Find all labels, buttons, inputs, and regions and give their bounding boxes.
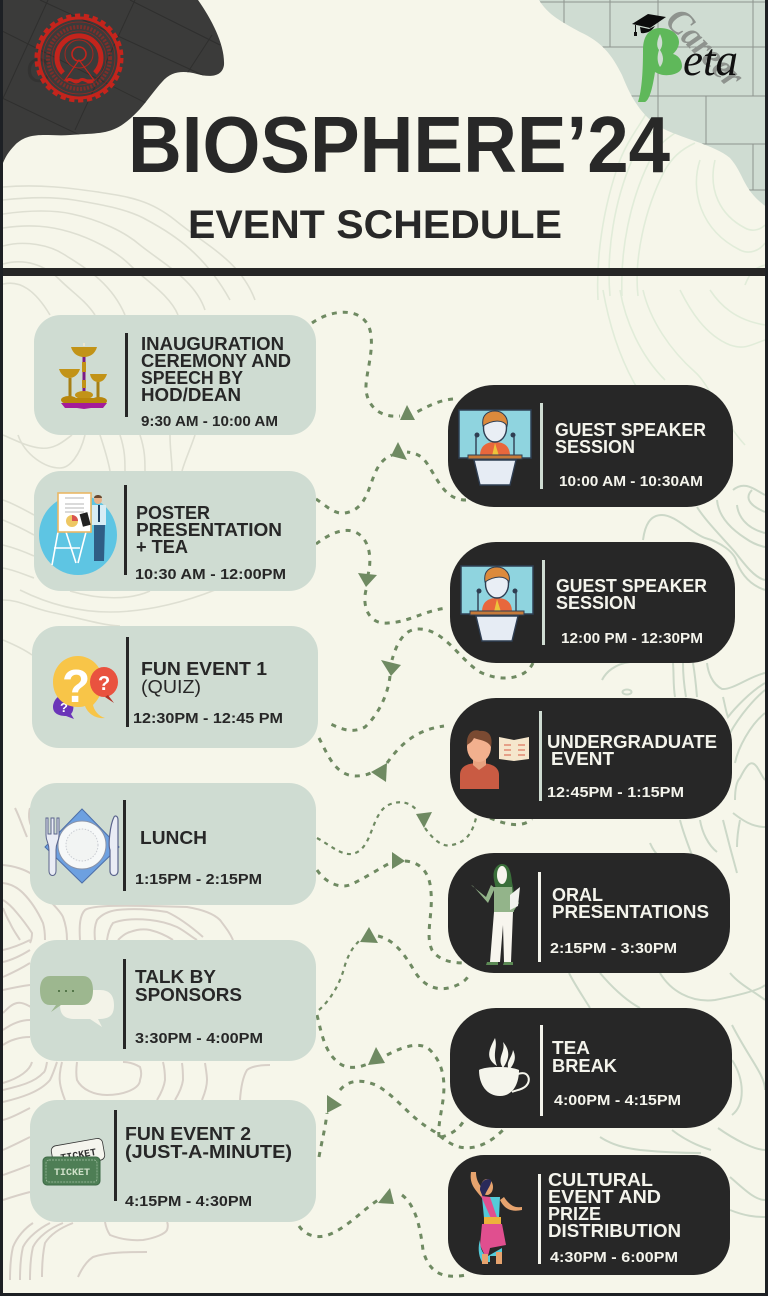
icon: tickets: TICKET bbox=[54, 1168, 90, 1179]
panel: fun event 2: 4:15PM - 4:30PM bbox=[125, 1193, 252, 1210]
logo: Beta Career: eta bbox=[683, 34, 738, 85]
panel: fun event 2 bbox=[30, 1100, 316, 1222]
panel: cultural event: PRIZE bbox=[548, 1204, 601, 1224]
panel: poster presentation: PRESENTATION bbox=[136, 520, 282, 540]
panel: poster presentation: + TEA bbox=[136, 537, 188, 557]
icon: question bubbles: ? bbox=[62, 660, 90, 712]
icon: question bubbles bbox=[53, 656, 118, 719]
icon: question bubbles: ? bbox=[60, 700, 68, 715]
header divider bbox=[0, 268, 768, 276]
panel: undergraduate event bbox=[450, 698, 732, 819]
panel: inauguration: 9:30 AM - 10:00 AM bbox=[141, 413, 278, 430]
subtitle: EVENT SCHEDULE bbox=[188, 203, 562, 247]
panel: inauguration: INAUGURATION bbox=[141, 334, 284, 354]
icon: dancer bbox=[471, 1172, 522, 1264]
panel: guest speaker 2: SESSION bbox=[556, 593, 636, 613]
panel: poster presentation: POSTER bbox=[136, 503, 210, 523]
logo: Beta Career: Career bbox=[658, 0, 753, 96]
panel: tea break bbox=[450, 1008, 732, 1128]
panel: guest speaker 1: SESSION bbox=[555, 437, 635, 457]
panel: lunch bbox=[30, 783, 316, 905]
top-right pale blob with grid bbox=[539, 0, 768, 208]
panel: poster presentation bbox=[34, 471, 316, 591]
panel: poster presentation: 10:30 AM - 12:00PM bbox=[135, 566, 286, 583]
panel: lunch: LUNCH bbox=[140, 828, 207, 848]
top-left dark blob with grid: C bbox=[26, 52, 51, 90]
logo: institute emblem bbox=[37, 16, 121, 100]
panel: talk by sponsors bbox=[30, 940, 316, 1061]
icon: ceremonial lamps bbox=[59, 343, 107, 409]
panel: guest speaker 1: GUEST SPEAKER bbox=[555, 420, 706, 440]
icon: tickets bbox=[43, 1138, 106, 1185]
panel: oral presentations: ORAL bbox=[552, 885, 603, 905]
panel: guest speaker 2 bbox=[450, 542, 735, 663]
panel: inauguration: SPEECH BY bbox=[141, 368, 243, 388]
icon: speaker at podium bbox=[461, 566, 533, 641]
panel: fun event 1: 12:30PM - 12:45 PM bbox=[133, 710, 283, 727]
panel: cultural event: CULTURAL bbox=[548, 1170, 653, 1190]
panel: fun event 1 bbox=[32, 626, 318, 748]
icon: plate and cutlery bbox=[45, 809, 119, 883]
icon: question bubbles: ? bbox=[98, 673, 110, 695]
icon: presenter with poster board bbox=[39, 493, 117, 575]
panel: inauguration: HOD/DEAN bbox=[141, 385, 241, 405]
icon: chat bubbles bbox=[40, 976, 114, 1027]
icon: student with book bbox=[460, 730, 529, 789]
panel: undergraduate event: EVENT bbox=[551, 749, 614, 769]
panel: fun event 1: FUN EVENT 1 bbox=[141, 659, 267, 679]
icon: steaming cup bbox=[479, 1038, 529, 1096]
panel: guest speaker 1: 10:00 AM - 10:30AM bbox=[559, 473, 703, 490]
panel: undergraduate event: UNDERGRADUATE bbox=[547, 732, 717, 752]
panel: cultural event: EVENT AND bbox=[548, 1187, 661, 1207]
panel: talk by sponsors: TALK BY bbox=[135, 967, 216, 987]
panel: talk by sponsors: 3:30PM - 4:00PM bbox=[135, 1030, 263, 1047]
panel: fun event 1: (QUIZ) bbox=[141, 677, 201, 697]
panel: undergraduate event: 12:45PM - 1:15PM bbox=[547, 784, 684, 801]
panel: inauguration: CEREMONY AND bbox=[141, 351, 291, 371]
panel: talk by sponsors: SPONSORS bbox=[135, 985, 242, 1005]
icon: speaker at podium bbox=[459, 410, 531, 485]
panel: lunch: 1:15PM - 2:15PM bbox=[135, 871, 262, 888]
connector arrows bbox=[299, 312, 533, 1276]
panel: guest speaker 1 bbox=[448, 385, 733, 507]
panel: fun event 2: (JUST-A-MINUTE) bbox=[125, 1142, 292, 1162]
panel: cultural event: 4:30PM - 6:00PM bbox=[550, 1249, 678, 1266]
panel: guest speaker 2: GUEST SPEAKER bbox=[556, 576, 707, 596]
panel: cultural event bbox=[448, 1155, 730, 1275]
panel: oral presentations: 2:15PM - 3:30PM bbox=[550, 940, 677, 957]
title: BIOSPHERE’24 bbox=[128, 100, 670, 189]
panel: oral presentations: PRESENTATIONS bbox=[552, 902, 709, 922]
panel: tea break: 4:00PM - 4:15PM bbox=[554, 1092, 681, 1109]
panel: guest speaker 2: 12:00 PM - 12:30PM bbox=[561, 630, 703, 647]
panel: cultural event: DISTRIBUTION bbox=[548, 1221, 681, 1241]
panel: fun event 2: FUN EVENT 2 bbox=[125, 1124, 251, 1144]
icon: woman presenting bbox=[471, 864, 520, 965]
panel: tea break: TEA bbox=[552, 1038, 590, 1058]
panel: tea break: BREAK bbox=[552, 1056, 617, 1076]
icon: tickets: TICKET bbox=[60, 1148, 97, 1165]
panel: inauguration bbox=[34, 315, 316, 435]
top-left dark blob with grid bbox=[0, 0, 224, 163]
panel: oral presentations bbox=[448, 853, 730, 973]
